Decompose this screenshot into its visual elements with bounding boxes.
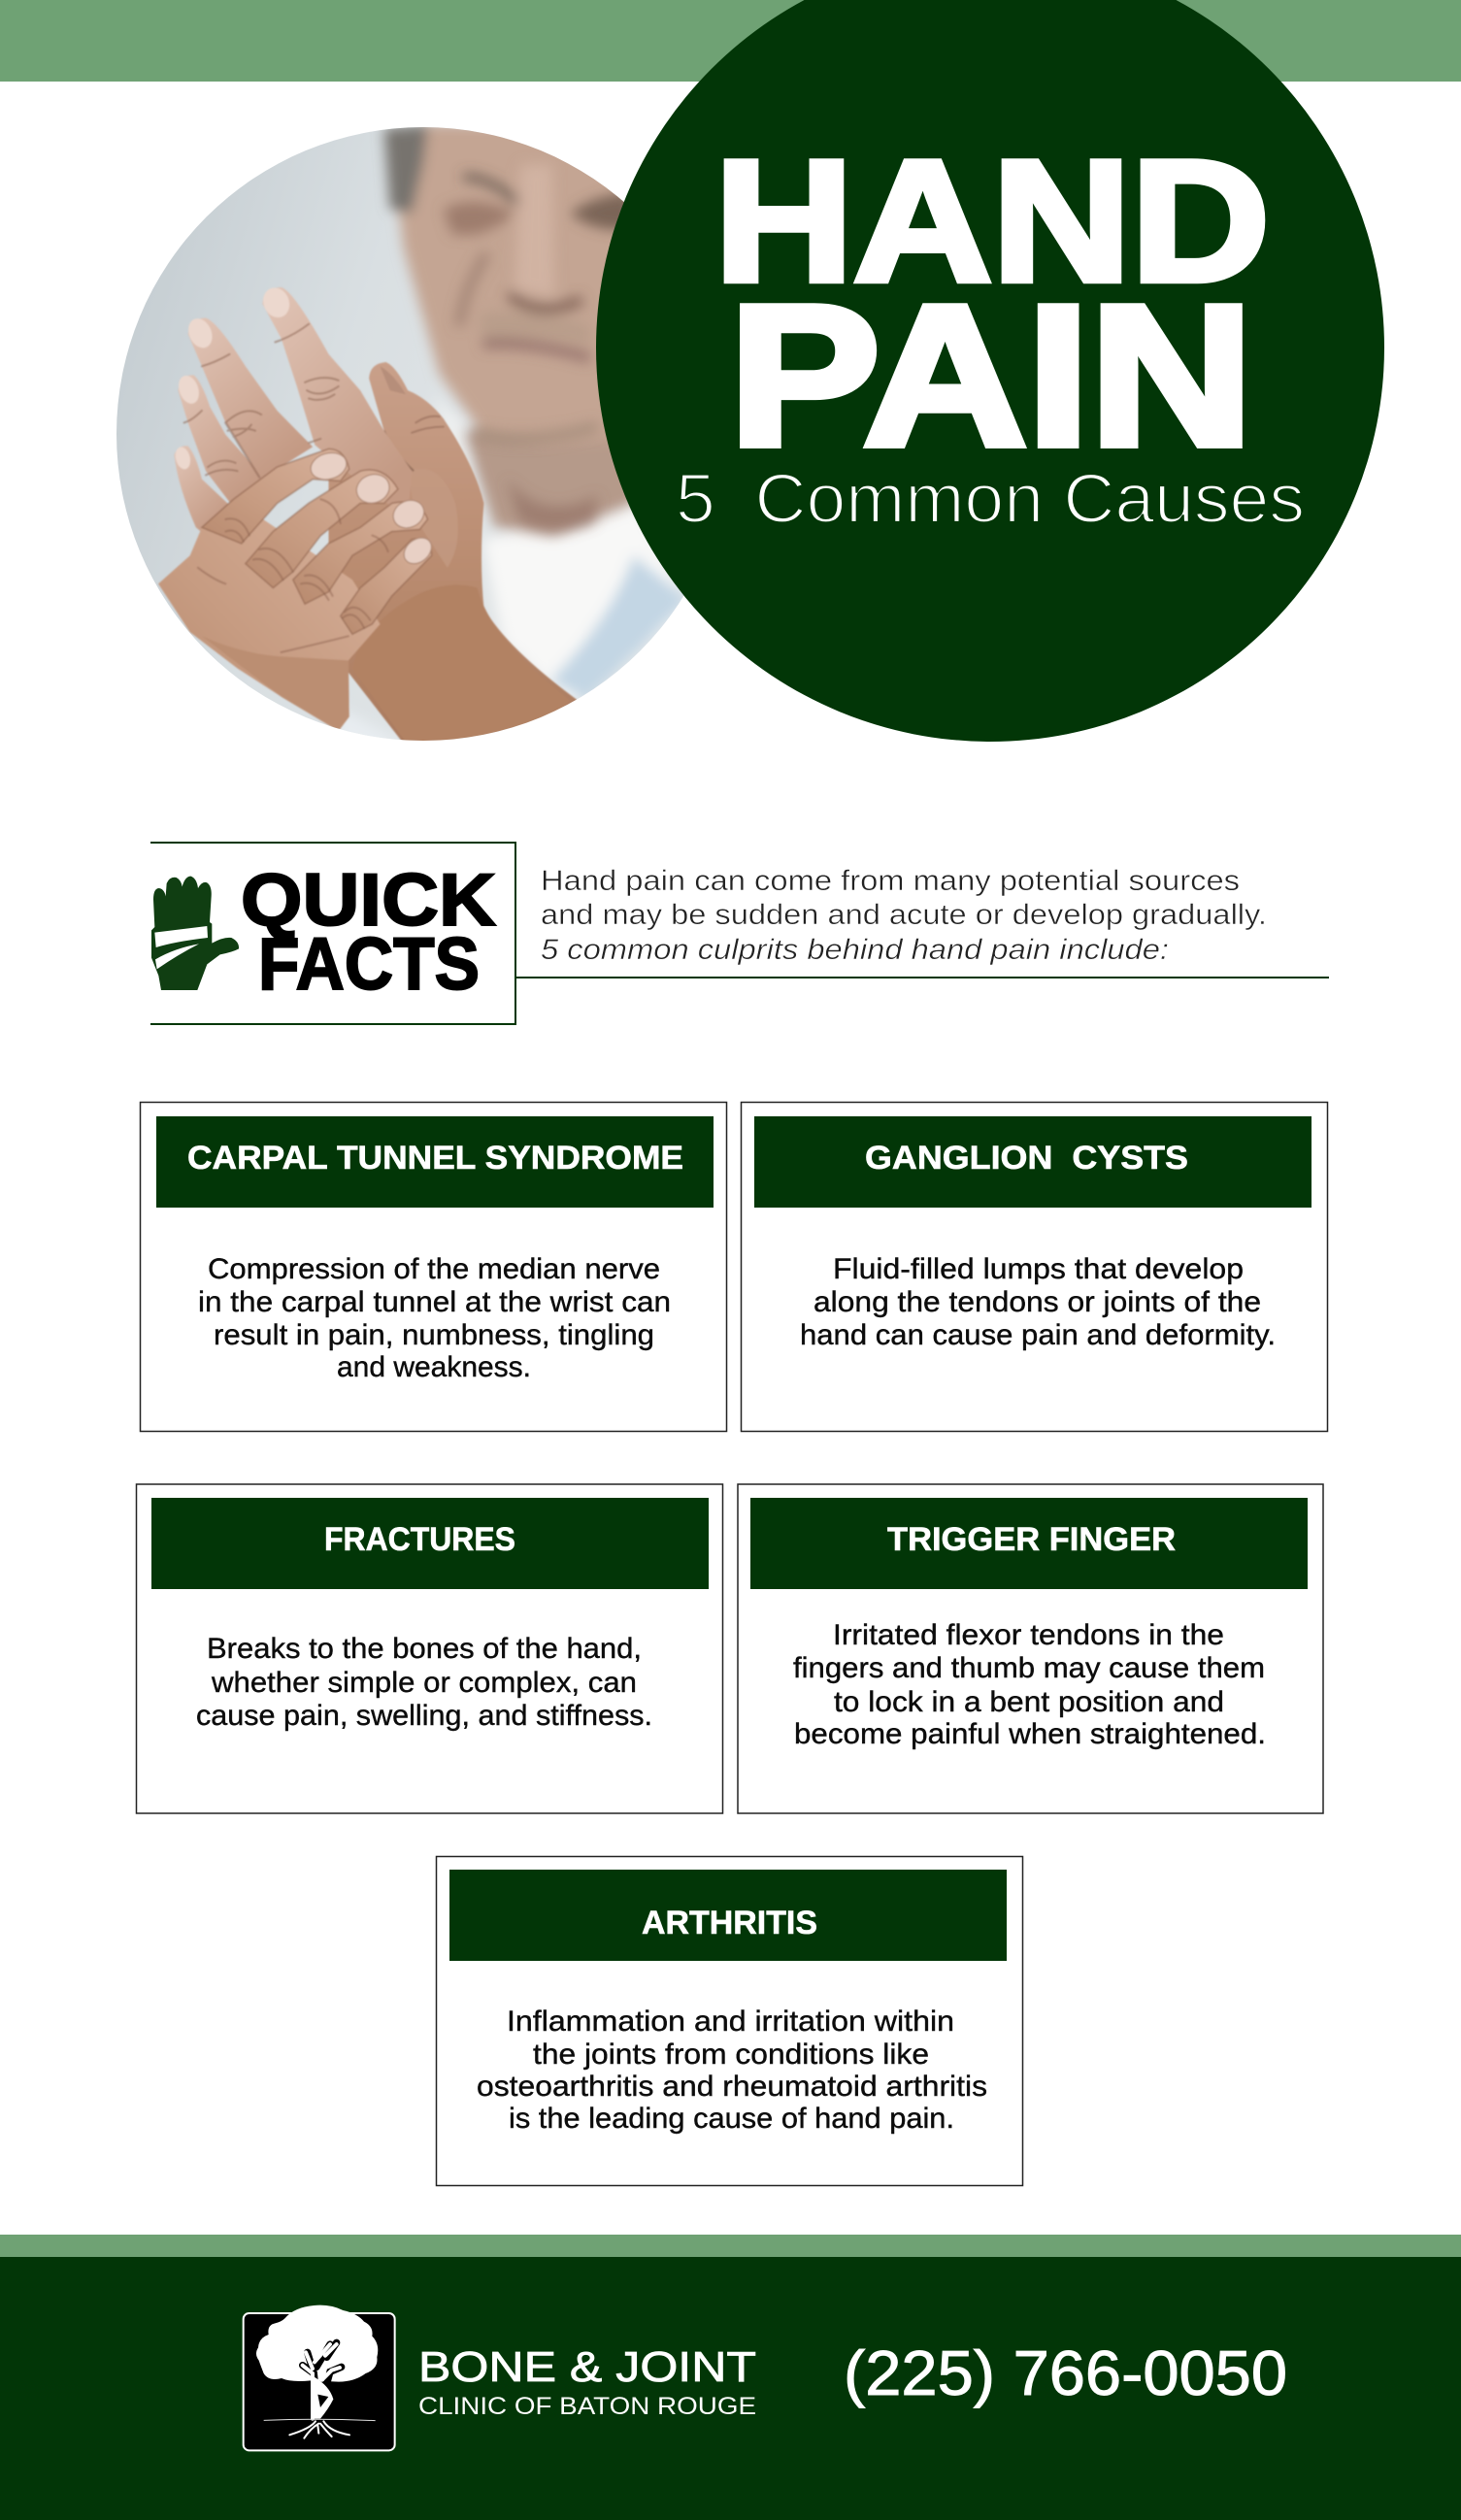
top green band [0,0,1461,82]
description: the joints from conditions like [533,2039,929,2071]
panel: fractures: FRACTURES [324,1521,515,1558]
description [198,1253,671,1383]
heading [449,1870,1007,1961]
front hand [157,518,381,696]
title: HAND: HAND [714,124,1270,317]
description: Fluid-filled lumps that develop [833,1253,1244,1285]
description [800,1253,1276,1351]
description [793,1619,1266,1750]
description: hand can cause pain and deformity. [800,1319,1276,1351]
back hand body, wrist and thumb [328,362,579,753]
description: along the tendons or joints of the [814,1286,1261,1318]
subtitle: 5 Common Causes [676,461,1305,538]
description: cause pain, swelling, and stiffness. [196,1700,652,1732]
panel: carpal tunnel syndrome [140,1103,726,1431]
quick facts frame [150,843,1329,1024]
blurred man [333,124,689,757]
back-hand nails [173,283,294,471]
quick facts block [150,843,1329,1024]
description: osteoarthritis and rheumatoid arthritis [477,2071,987,2103]
front-hand nails [310,452,432,565]
panel: arthritis [437,1856,1023,2186]
front-hand fingers [202,448,432,634]
heading [151,1498,709,1589]
quick facts block: FACTS [258,923,480,1006]
quick facts heading: QUICK [241,859,496,942]
description [196,1633,652,1732]
description [477,2006,987,2135]
panel: trigger finger [738,1484,1323,1813]
description: to lock in a bent position and [834,1686,1224,1718]
panel: ganglion cysts [742,1103,1328,1431]
footer band: CLINIC OF BATON ROUGE [418,2393,756,2420]
description: is the leading cause of hand pain. [509,2103,954,2135]
heading [156,1116,714,1208]
intro text: 5 common culprits behind hand pain include: [541,934,1169,966]
photo: older man holding his painful hand [116,127,683,741]
heading [754,1116,1312,1208]
panel: trigger finger: TRIGGER FINGER [887,1521,1176,1558]
title circle [596,0,1384,742]
phone number: (225) 766-0050 [844,2338,1287,2408]
panel: ganglion cysts: GANGLION CYSTS [865,1140,1188,1177]
description: Irritated flexor tendons in the [833,1619,1224,1651]
panel: carpal tunnel syndrome: CARPAL TUNNEL SYNDROME [187,1140,683,1177]
description: Compression of the median nerve [208,1253,660,1285]
footer band [0,2235,1461,2520]
back-hand fingers [174,446,229,536]
intro text [541,865,1267,966]
description: Breaks to the bones of the hand, [207,1633,642,1665]
heading [750,1498,1308,1589]
intro text: and may be sudden and acute or develop gradually. [541,899,1267,931]
description: whether simple or complex, can [211,1667,637,1699]
icon: bandaged hand [151,877,239,990]
title: PAIN: PAIN [729,264,1253,487]
description: fingers and thumb may cause them [793,1652,1265,1684]
intro text: Hand pain can come from many potential sources [541,865,1240,897]
description: Inflammation and irritation within [507,2006,954,2038]
description: and weakness. [337,1351,531,1383]
description: result in pain, numbness, tingling [214,1319,654,1351]
description: become painful when straightened. [794,1718,1266,1750]
clinic name: BONE & JOINT [418,2343,756,2391]
panel: fractures [136,1484,722,1813]
description: in the carpal tunnel at the wrist can [198,1286,671,1318]
panel: arthritis: ARTHRITIS [642,1905,817,1941]
logo: bone and joint tree [244,2305,395,2450]
